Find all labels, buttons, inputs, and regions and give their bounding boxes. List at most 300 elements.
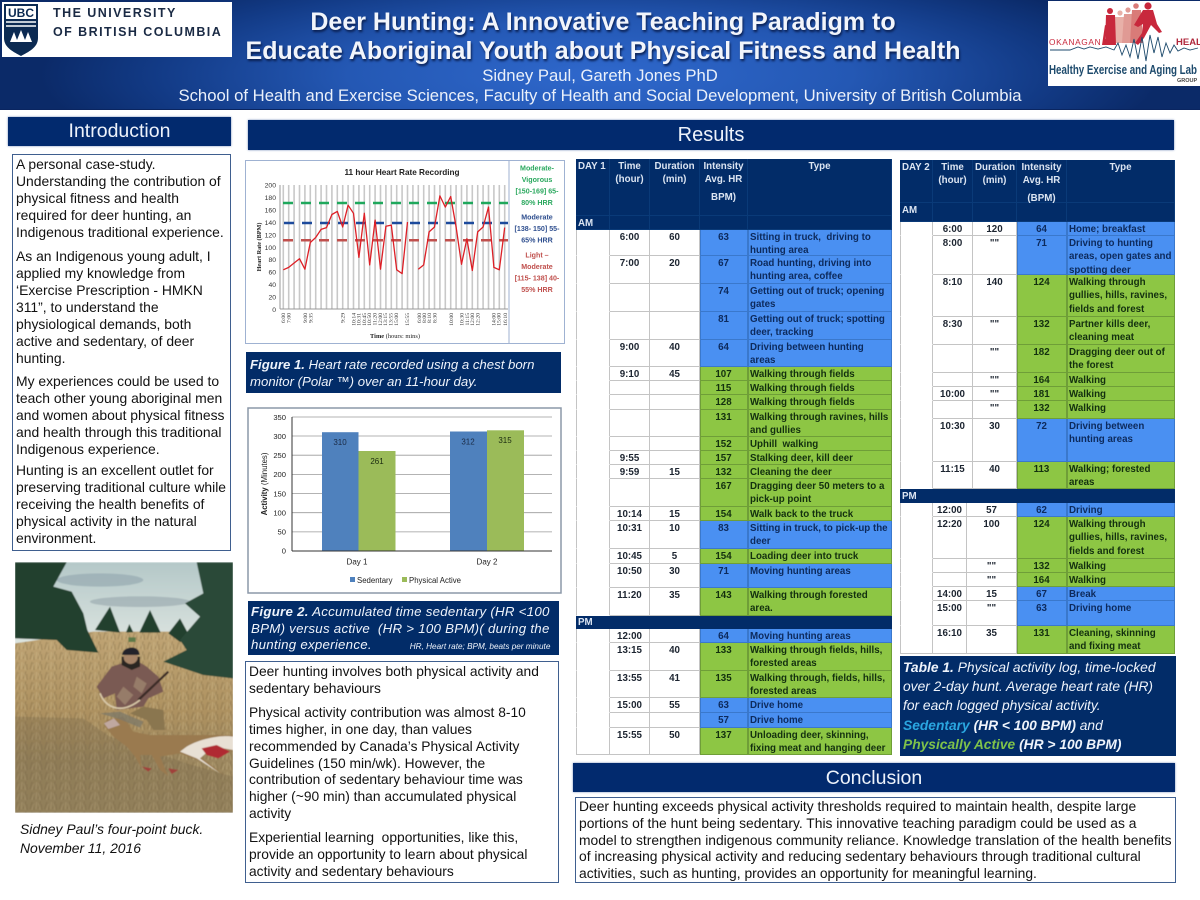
table: day 1 activity log: Unloading deer, skinning, — [750, 730, 869, 741]
panel: key findings text — [245, 661, 559, 883]
authors and affiliation: School of Health and Exercise Sciences, Faculty of Health and Social Development, University of British Columbia — [178, 86, 1022, 105]
table: day 2 afternoon activity log: 15 — [986, 589, 997, 600]
x axis labels: 7:00 — [286, 313, 292, 323]
table: day 2 morning activity log: Driving between — [1069, 421, 1144, 432]
x axis labels: 9:35 — [308, 313, 314, 323]
table: day 2 morning activity log: DAY 2 — [902, 162, 930, 173]
panel: introduction text: receiving the health benefits of — [16, 496, 204, 512]
x axis labels: 13:15 — [383, 313, 389, 326]
table: day 2 morning activity log: "" — [990, 319, 999, 330]
panel: conclusion text: model to strengthen indigenous community reliance. Knowledge translation of the health benefits — [579, 832, 1172, 848]
x axis labels: 12:00 — [378, 313, 384, 326]
table: day 1 activity log: 135 — [715, 673, 732, 684]
table: day 1 activity log: DAY 1 — [578, 161, 606, 172]
table: day 1 activity log: 71 — [718, 566, 729, 577]
figure 2 caption: Figure 2. Accumulated time sedentary (HR <100 — [251, 604, 550, 619]
table: day 1 activity log: fixing meat and hanging deer — [750, 743, 885, 754]
table: day 2 morning activity log: the forest — [1069, 360, 1113, 371]
panel: introduction text: active and sedentary, of deer — [16, 333, 194, 349]
table: day 1 activity log: 11:20 — [617, 590, 642, 601]
table: day 1 activity log: BPM) — [711, 192, 736, 203]
table: day 2 morning activity log: 120 — [986, 224, 1003, 235]
panel: introduction text: physical fitness and health — [16, 190, 179, 206]
table: day 1 activity log: Walking through fields — [750, 369, 855, 380]
panel: key findings text: Deer hunting involves both physical activity and — [249, 664, 539, 679]
table: day 2 afternoon activity log: 63 — [1036, 603, 1047, 614]
table: day 1 activity log: 15:55 — [617, 730, 642, 741]
axis labels: 0 — [282, 546, 286, 556]
panel: introduction text: Hunting is an excellent outlet for — [16, 462, 214, 478]
table: day 1 activity log: 74 — [718, 286, 729, 297]
x axis labels: 8:10 — [427, 313, 433, 323]
heading: Introduction — [8, 117, 231, 146]
table: day 1 activity log: Loading deer into truck — [750, 551, 858, 562]
table: day 2 morning activity log: 10:30 — [940, 421, 965, 432]
table: day 2 afternoon activity log: Cleaning, skinning — [1069, 628, 1156, 639]
table: day 1 activity log: 13:15 — [617, 645, 642, 656]
y axis labels: 20 — [268, 294, 276, 302]
table: day 2 morning activity log: Time — [941, 162, 964, 173]
y axis labels: 140 — [265, 220, 276, 227]
y axis labels: 40 — [268, 282, 276, 289]
legend: intensity zones — [515, 164, 560, 294]
heart rate line — [283, 196, 505, 274]
table: day 1 activity log: 5 — [672, 551, 677, 562]
table: day 2 afternoon activity log: and fixing meat — [1069, 641, 1141, 652]
table: day 1 activity log: hunting area — [750, 245, 809, 256]
table: day 1 activity log: Walking through forested — [750, 590, 868, 601]
figure 2 caption: hunting experience. HR, Heart rate; BPM, beats per minute — [251, 637, 550, 652]
x axis labels: 16:10 — [503, 313, 509, 326]
panel: introduction text: and women about physical fitness — [16, 407, 224, 423]
panel: key findings text: activity — [249, 806, 291, 821]
axis labels: 300 — [273, 432, 286, 441]
table: day 2 morning activity log: areas, open gates and — [1069, 251, 1171, 262]
legend: intensity zones: Moderate — [521, 263, 553, 271]
table: day 2 morning activity log: 8:00 — [943, 238, 962, 249]
x axis labels: 10:14 — [352, 313, 358, 326]
photo caption: Sidney Paul’s four-point buck. — [20, 821, 203, 837]
table: day 1 activity log: Uphill walking — [750, 439, 818, 450]
axis labels: 50 — [278, 528, 286, 536]
chart title: 11 hour Heart Rate Recording — [344, 168, 460, 177]
table: day 2 morning activity log: 64 — [1036, 224, 1047, 235]
figure 1 caption: monitor (Polar ™) over an 11-hour day. — [250, 374, 477, 389]
hunter — [97, 647, 168, 730]
figure 1 caption: Figure 1. Heart rate recorded using a chest born — [250, 357, 534, 372]
table: day 1 activity log: 55 — [669, 700, 680, 711]
table: day 2 afternoon activity log: Walking — [1069, 561, 1106, 572]
table: day 1 activity log: 154 — [715, 551, 732, 562]
panel: introduction text: A personal case-study. — [16, 156, 156, 172]
table: day 1 activity log: 7:00 — [620, 258, 639, 269]
table: day 2 morning activity log: Walking — [1069, 389, 1106, 400]
x axis labels: 11:15 — [465, 313, 471, 326]
y axis labels: 200 — [265, 182, 276, 190]
panel: introduction text: As an Indigenous young adult, I — [16, 248, 211, 264]
table: day 2 morning activity log: (BPM) — [1027, 193, 1056, 204]
figure 2 caption: BPM) versus active (HR > 100 BPM)( during the — [251, 620, 550, 636]
table: day 2 morning activity log: Duration — [975, 162, 1015, 173]
table: day 2 morning activity log: AM — [902, 205, 917, 216]
table: day 2 morning activity log: "" — [990, 403, 999, 414]
table: day 1 activity log: 131 — [715, 412, 732, 423]
table: day 1 activity log: 81 — [718, 314, 729, 325]
legend: intensity zones: 55% HRR — [521, 286, 553, 294]
panel: conclusion text — [575, 797, 1176, 883]
axis labels: 100 — [273, 508, 286, 518]
y axis labels: 160 — [265, 208, 276, 214]
panel: key findings text: activity and sedentary behaviours — [249, 864, 454, 879]
panel: conclusion text: activities, such as hunting, provides an opportunity for meaningful learning. — [579, 865, 1037, 881]
legend: intensity zones: [150-169] 65- — [516, 188, 559, 196]
x axis labels: 6:00 — [281, 313, 287, 323]
table: day 1 activity log: 20 — [669, 258, 680, 269]
icon: UBC shield: UBC — [8, 6, 34, 20]
legend: Physical Active — [409, 576, 461, 585]
title — [246, 8, 962, 68]
axis labels: 250 — [273, 451, 286, 460]
table: day 1 activity log: 154 — [715, 509, 732, 520]
table: day 2 afternoon activity log: fields and forest — [1069, 546, 1144, 557]
table: day 2 morning activity log: 124 — [1033, 277, 1050, 288]
table: day 2 morning activity log: 30 — [989, 421, 1000, 432]
axis labels — [273, 413, 286, 556]
table: day 1 activity log — [576, 159, 892, 755]
chart: accumulated sedentary vs active time: Day 1 — [347, 558, 368, 566]
table: day 1 activity log: 6:00 — [620, 232, 639, 243]
chart: accumulated sedentary vs active time — [247, 407, 562, 594]
table: day 2 morning activity log: "" — [990, 389, 999, 400]
panel: introduction text: hunting. — [16, 350, 65, 366]
legend: intensity zones: 80% HRR — [521, 199, 553, 207]
table: day 2 afternoon activity log: Break — [1069, 589, 1096, 600]
x axis labels: 12:00 — [470, 313, 476, 326]
x axis labels: 14:00 — [492, 313, 498, 326]
table: day 2 morning activity log: Walking — [1069, 403, 1106, 414]
table: day 1 activity log: 128 — [715, 397, 732, 408]
table: day 2 morning activity log: 10:00 — [940, 389, 965, 400]
authors and affiliation: Sidney Paul, Gareth Jones PhD — [482, 66, 718, 85]
x axis labels: 15:00 — [496, 313, 502, 326]
table: day 2 morning activity log: Type — [1109, 162, 1132, 173]
x axis labels: 10:31 — [356, 313, 362, 326]
table: day 2 afternoon activity log: 16:10 — [937, 628, 962, 639]
table 1 caption: Table 1. Physical activity log, time-locked — [903, 660, 1156, 675]
table: day 2 morning activity log: 164 — [1033, 375, 1050, 386]
chart: 11 hour heart rate recording — [245, 160, 565, 344]
bars: day 2 — [450, 430, 524, 551]
table: day 2 morning activity log: gullies, hills, ravines, — [1069, 290, 1167, 301]
table: day 1 activity log: PM — [578, 617, 593, 628]
table: day 2 morning activity log: 132 — [1033, 403, 1050, 414]
y axis labels: 180 — [265, 195, 276, 202]
table 1 caption: Physically Active (HR > 100 BPM) — [903, 737, 1121, 752]
legend — [350, 576, 461, 585]
table: day 1 activity log: Moving hunting areas — [750, 631, 851, 642]
table: day 2 morning activity log: 11:15 — [940, 464, 965, 475]
panel: key findings text: Guidelines (150 min/wk). However, the — [249, 756, 485, 771]
table: day 1 activity log: 63 — [718, 232, 729, 243]
x axis labels: 9:29 — [340, 313, 346, 323]
table: day 1 activity log: pick-up point — [750, 494, 811, 505]
x axis labels: 10:50 — [367, 313, 373, 326]
x axis labels: 15:55 — [405, 313, 411, 326]
table: day 1 activity log: 13:55 — [617, 673, 642, 684]
table: day 1 activity log: 167 — [715, 481, 732, 492]
table: day 1 activity log: Road hunting, driving into — [750, 258, 871, 269]
table: day 1 activity log: 9:59 — [620, 467, 639, 478]
panel: introduction text: applied my knowledge from — [16, 265, 185, 281]
table: day 2 afternoon activity log: PM — [902, 491, 917, 502]
table: day 1 activity log: Drive home — [750, 715, 803, 726]
x axis labels: 11:20 — [372, 313, 378, 326]
table: day 2 afternoon activity log: Driving — [1069, 505, 1103, 516]
x axis labels: 9:00 — [303, 313, 309, 323]
table: day 2 morning activity log: spotting deer — [1069, 265, 1131, 276]
table: day 1 activity log: 64 — [718, 631, 729, 642]
table: day 2 morning activity log: 182 — [1033, 347, 1050, 358]
panel: introduction text: Understanding the contribution of — [16, 173, 221, 189]
panel: introduction text: ‘Exercise Prescription - HMKN — [16, 282, 203, 298]
table: day 1 activity log: 15:00 — [617, 700, 642, 711]
table: day 2 morning activity log: Avg. HR — [1023, 175, 1060, 186]
table: day 1 activity log: 9:10 — [620, 369, 639, 380]
x axis labels: 6:00 — [417, 313, 423, 323]
y axis title: Activity (Minutes) — [260, 452, 269, 515]
table: day 1 activity log: Getting out of truck; opening — [750, 286, 884, 297]
table: day 1 activity log: areas — [750, 355, 775, 366]
table: day 2 morning activity log: 40 — [989, 464, 1000, 475]
threshold lines — [283, 203, 508, 240]
panel: introduction text: teach other young aboriginal men — [16, 390, 222, 406]
table: day 2 afternoon activity log — [900, 489, 1175, 654]
panel: introduction text: Indigenous traditional experience. — [16, 224, 224, 240]
table: day 2 afternoon activity log: 100 — [983, 519, 1000, 530]
panel: introduction text: and health through this traditional — [16, 424, 221, 440]
table: day 1 activity log: Time — [618, 161, 641, 172]
table: day 1 activity log: Avg. HR — [705, 174, 742, 185]
table: day 1 activity log: 30 — [669, 566, 680, 577]
bars: day 1: 261 — [370, 457, 384, 466]
x axis labels: 15:00 — [394, 313, 400, 326]
table: day 1 activity log: (hour) — [615, 174, 644, 185]
y axis labels: 0 — [272, 307, 276, 314]
panel: key findings text: times higher, in one day, than values — [249, 722, 472, 737]
table: day 1 activity log: Walking through ravines, hills — [750, 412, 888, 423]
legend: intensity zones: [138- 150] 55- — [515, 225, 560, 233]
table: day 2 afternoon activity log: 57 — [986, 505, 997, 516]
table: day 1 activity log: 143 — [715, 590, 732, 601]
table: day 2 morning activity log: 6:00 — [943, 224, 962, 235]
table: day 2 afternoon activity log: 132 — [1033, 561, 1050, 572]
table: day 1 activity log: Walking through, fields, hills, — [750, 673, 885, 684]
x axis labels: 10:00 — [449, 313, 455, 326]
table: day 1 activity log: Walk back to the truck — [750, 509, 853, 520]
y axis labels — [265, 182, 276, 314]
figure 1 caption — [246, 352, 561, 393]
logo wordmark: THE UNIVERSITY — [53, 6, 177, 20]
panel: key findings text: Experiential learning opportunities, like this, — [249, 830, 518, 845]
table: day 1 activity log: Cleaning the deer — [750, 467, 832, 478]
table: day 1 activity log: 64 — [718, 342, 729, 353]
panel: introduction text: physical activity in the natural — [16, 513, 197, 529]
table: day 1 activity log: 10:50 — [617, 566, 642, 577]
photo: hunter with four-point buck — [15, 562, 233, 813]
table: day 1 activity log: hunting area, coffee — [750, 271, 843, 282]
chart: accumulated sedentary vs active time: Day 2 — [477, 558, 498, 566]
table: day 1 activity log: 63 — [718, 700, 729, 711]
table: day 2 afternoon activity log: 15:00 — [937, 603, 962, 614]
table: day 1 activity log: 132 — [715, 467, 732, 478]
table: day 1 activity log: 133 — [715, 645, 732, 656]
panel: introduction text: Indigenous experience. — [16, 441, 160, 457]
table: day 2 afternoon activity log: 12:20 — [937, 519, 962, 530]
table: day 1 activity log: 10:14 — [617, 509, 642, 520]
table: day 1 activity log: Sitting in truck, to pick-up the — [750, 523, 888, 534]
heading: Conclusion — [573, 763, 1175, 792]
y axis labels: 100 — [265, 245, 276, 252]
table: day 2 morning activity log: "" — [990, 347, 999, 358]
legend: intensity zones: 65% HRR — [521, 236, 553, 244]
table: day 1 activity log: 10:31 — [617, 523, 642, 534]
table: day 2 morning activity log: 140 — [986, 277, 1003, 288]
Healthy Exercise and Aging Lab logo: OKANAGAN — [1049, 37, 1101, 47]
table: day 1 activity log: Intensity — [703, 161, 744, 172]
figure 2 caption — [248, 601, 559, 655]
panel: introduction text — [12, 154, 231, 551]
table: day 2 morning activity log: Walking — [1069, 375, 1106, 386]
table: day 1 activity log: area. — [750, 603, 773, 614]
table: day 1 activity log: 9:00 — [620, 342, 639, 353]
table: day 1 activity log: Stalking deer, kill deer — [750, 453, 853, 464]
panel: key findings text: Physical activity contribution was almost 8-10 — [249, 705, 526, 720]
table: day 2 afternoon activity log: "" — [987, 575, 996, 586]
table: day 1 activity log: Driving between hunting — [750, 342, 864, 353]
table: day 2 afternoon activity log: Walking — [1069, 575, 1106, 586]
table: day 1 activity log: 45 — [669, 369, 680, 380]
bars: day 2: 315 — [498, 436, 512, 445]
panel: introduction text: required for deer hunting, an — [16, 207, 191, 223]
table 1 caption — [900, 656, 1176, 756]
table: day 1 activity log: (min) — [663, 174, 686, 185]
table: day 2 morning activity log: cleaning meat — [1069, 332, 1134, 343]
table: day 1 activity log: Sitting in truck, driving to — [750, 232, 871, 243]
table: day 2 morning activity log: "" — [990, 238, 999, 249]
table: day 1 activity log: Drive home — [750, 700, 803, 711]
table: day 2 morning activity log: 8:30 — [943, 319, 962, 330]
table: day 2 afternoon activity log: 35 — [986, 628, 997, 639]
table: day 1 activity log: 10 — [669, 523, 680, 534]
table: day 2 morning activity log: (hour) — [938, 175, 967, 186]
x axis labels — [281, 313, 509, 326]
table: day 1 activity log: forested areas — [750, 686, 817, 697]
photo caption: November 11, 2016 — [20, 840, 141, 856]
table 1 caption: Sedentary (HR < 100 BPM) and — [903, 718, 1103, 733]
table: day 2 morning activity log: hunting areas — [1069, 434, 1133, 445]
table: day 1 activity log: 152 — [715, 439, 732, 450]
table: day 2 morning activity log: Intensity — [1021, 162, 1062, 173]
table: day 1 activity log: 41 — [669, 673, 680, 684]
x axis labels: 12:20 — [476, 313, 482, 326]
y axis labels: 60 — [268, 270, 276, 277]
table: day 2 morning activity log: 132 — [1033, 319, 1050, 330]
heading: Introduction: Introduction — [69, 120, 170, 142]
table: day 2 morning activity log: Partner kills deer, — [1069, 319, 1150, 330]
table 1 caption: for each logged physical activity. — [903, 698, 1101, 713]
table: day 1 activity log: 157 — [715, 453, 732, 464]
table: day 2 morning activity log: 8:10 — [943, 277, 962, 288]
table: day 1 activity log: 60 — [669, 232, 680, 243]
table: day 1 activity log: AM — [578, 218, 593, 229]
legend: intensity zones: Moderate- — [520, 164, 555, 172]
photo caption — [20, 821, 203, 856]
header banner — [0, 0, 1200, 110]
table: day 1 activity log: 10:45 — [617, 551, 642, 562]
legend: intensity zones: Vigorous — [522, 176, 552, 184]
table: day 2 morning activity log: (min) — [983, 175, 1006, 186]
table: day 1 activity log: 40 — [669, 645, 680, 656]
x axis labels: 8:30 — [432, 313, 438, 323]
panel: introduction text: My experiences could be used to — [16, 373, 219, 389]
title: Deer Hunting: A Innovative Teaching Paradigm to — [310, 8, 896, 36]
heading: Results — [248, 120, 1174, 150]
panel: conclusion text: Deer hunting exceeds physical activity thresholds required to maintain health, despite large — [579, 798, 1136, 814]
bars: day 1: 310 — [333, 438, 347, 447]
table: day 2 morning activity log: fields and forest — [1069, 304, 1144, 315]
table: day 2 morning activity log — [900, 160, 1175, 489]
panel: key findings text: sedentary behaviours — [249, 681, 381, 696]
logo wordmark: OF BRITISH COLUMBIA — [53, 25, 222, 39]
table: day 2 morning activity log: areas — [1069, 477, 1094, 488]
axis labels: 200 — [273, 470, 286, 479]
table: day 1 activity log: 50 — [669, 730, 680, 741]
table: day 1 activity log: 35 — [669, 590, 680, 601]
table: day 2 morning activity log: Walking; forested — [1069, 464, 1150, 475]
table: day 2 morning activity log: Home; breakfast — [1069, 224, 1145, 235]
y axis title: Heart Rate (BPM) — [256, 223, 263, 271]
table: day 1 activity log: 137 — [715, 730, 732, 741]
table: day 2 afternoon activity log: Walking through — [1069, 519, 1146, 530]
table: day 2 afternoon activity log: 14:00 — [937, 589, 962, 600]
table: day 2 morning activity log: Walking through — [1069, 277, 1146, 288]
table: day 1 activity log: Duration — [654, 161, 695, 172]
title: Educate Aboriginal Youth about Physical Fitness and Health — [246, 37, 960, 65]
table: day 2 afternoon activity log: 131 — [1033, 628, 1050, 639]
table: day 2 morning activity log: 113 — [1034, 464, 1049, 475]
axis labels: 150 — [273, 490, 286, 498]
table: day 1 activity log: deer, tracking — [750, 327, 813, 338]
table: day 2 afternoon activity log: 164 — [1033, 575, 1050, 586]
Healthy Exercise and Aging Lab logo — [1048, 1, 1200, 86]
table: day 1 activity log: gates — [750, 299, 775, 310]
deer — [100, 712, 233, 777]
bars: day 1 — [322, 432, 396, 551]
table: day 1 activity log: 40 — [669, 342, 680, 353]
table: day 1 activity log: Getting out of truck; spotting — [750, 314, 885, 325]
table: day 1 activity log: forested areas — [750, 658, 817, 669]
table: day 1 activity log: and gullies — [750, 425, 801, 436]
table: day 2 afternoon activity log: 67 — [1036, 589, 1047, 600]
panel: introduction text: environment. — [16, 530, 96, 546]
table: day 2 afternoon activity log: 62 — [1036, 505, 1047, 516]
table: day 1 activity log: 15 — [669, 509, 680, 520]
axis labels: 350 — [273, 413, 286, 422]
x axis labels: 13:55 — [388, 313, 394, 326]
table: day 2 morning activity log: 72 — [1036, 421, 1047, 432]
x axis labels: 8:00 — [422, 313, 428, 323]
panel: introduction text: preserving traditional culture while — [16, 479, 226, 495]
